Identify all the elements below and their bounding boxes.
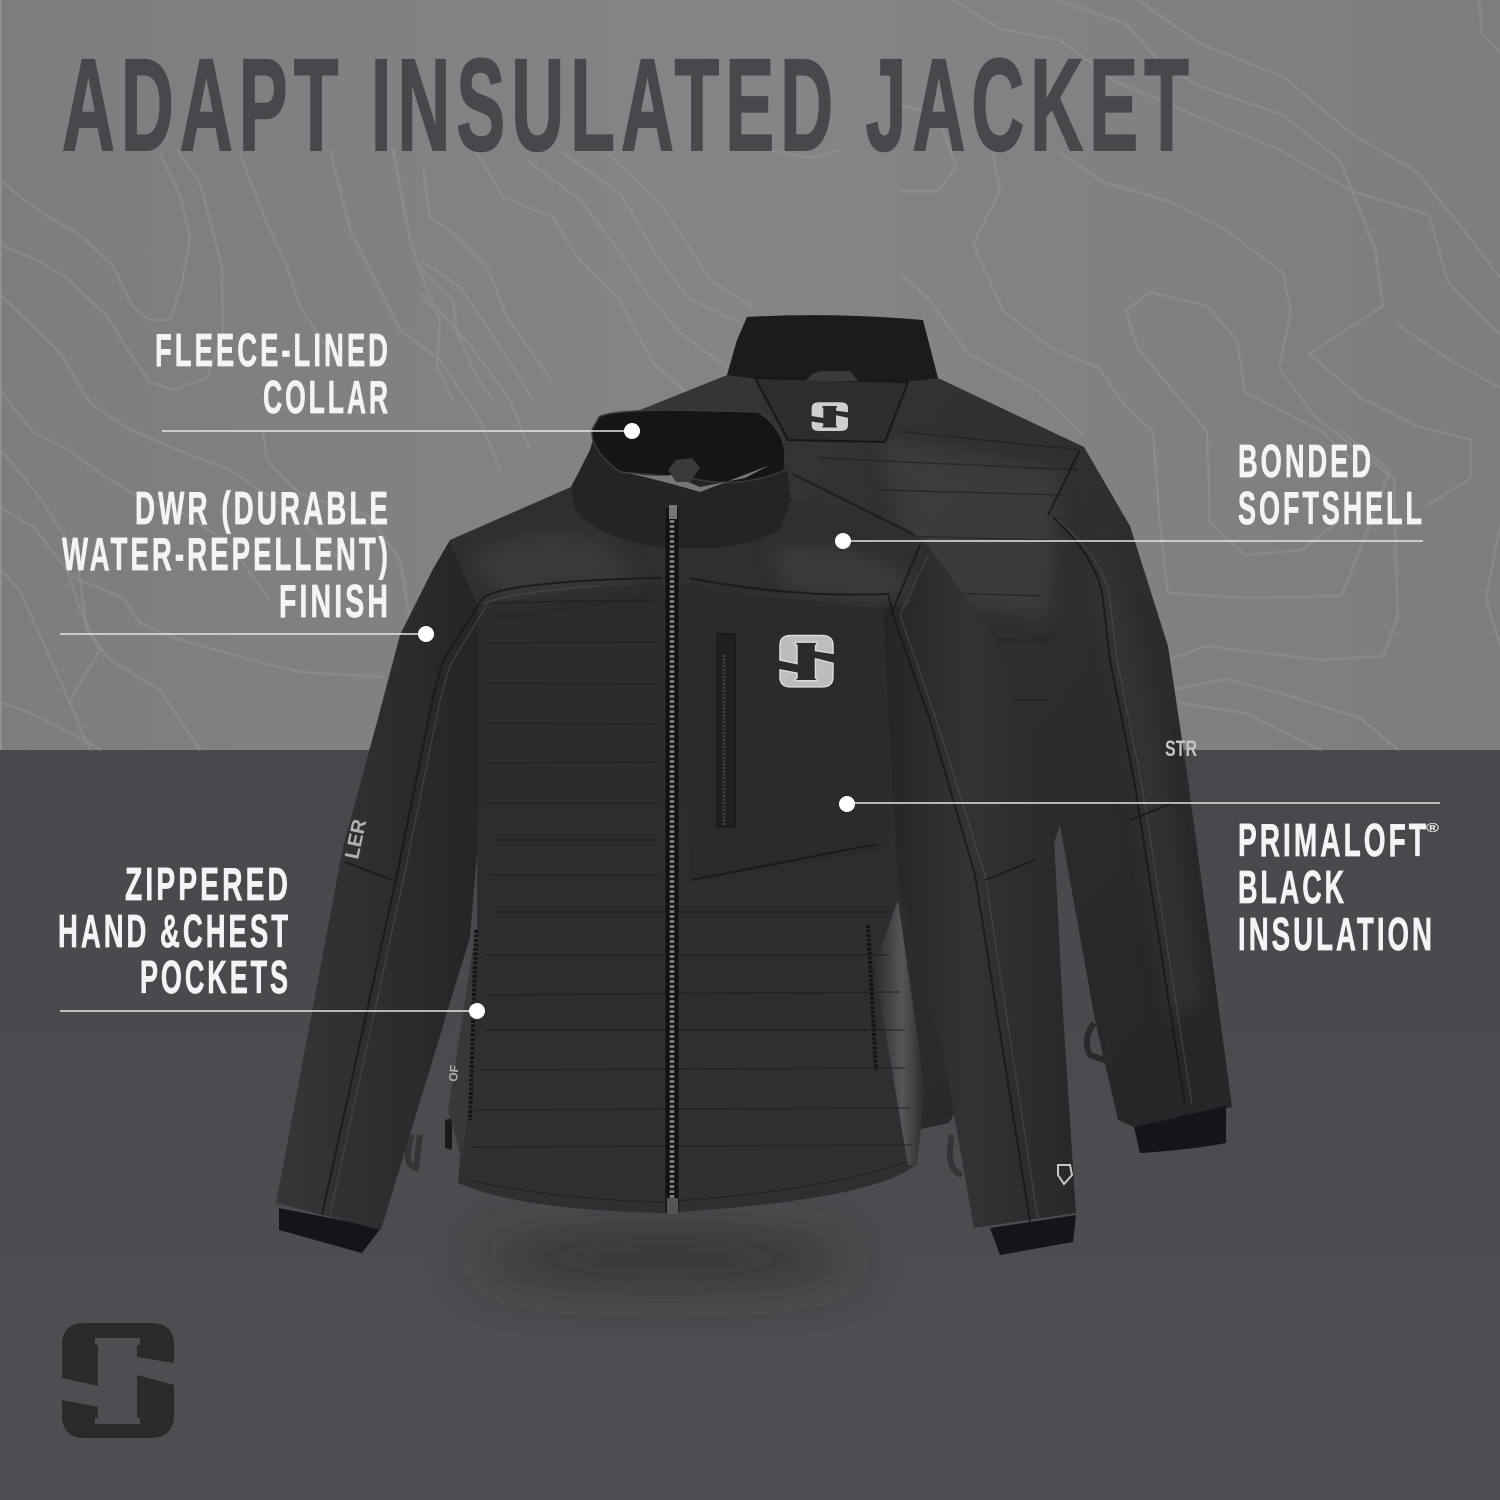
rear cuff	[1134, 1106, 1226, 1153]
rear sleeve brand text: STR	[1165, 736, 1197, 761]
right hand pocket zip	[868, 925, 876, 1070]
marker dot	[835, 533, 851, 549]
rear collar	[727, 315, 938, 384]
right thumb loop	[950, 1135, 962, 1175]
marker dot	[469, 1003, 485, 1019]
label text: HAND &CHEST	[58, 905, 291, 957]
label text: ®	[1426, 820, 1440, 835]
chest zip pocket	[717, 634, 735, 827]
shoulder highlight	[470, 533, 640, 600]
label text: BLACK	[1238, 861, 1347, 913]
label text	[155, 324, 391, 423]
right cuff mark	[1058, 1165, 1072, 1184]
yoke seam	[483, 578, 662, 598]
marker dot	[839, 796, 855, 812]
zipper pull	[667, 1198, 678, 1214]
label text: BONDED	[1238, 435, 1374, 487]
callout: bonded softshell	[835, 435, 1425, 549]
label text: COLLAR	[263, 371, 391, 423]
leader line	[843, 540, 1423, 542]
body	[458, 560, 917, 1213]
front jacket	[276, 410, 1076, 1255]
stand collar	[571, 412, 791, 548]
collar zip pull	[669, 505, 677, 519]
label text: FLEECE-LINED	[155, 324, 391, 376]
topographic contour pattern	[0, 0, 1500, 750]
collar lining band	[615, 465, 770, 492]
side lining sheen	[868, 900, 925, 1165]
rear jacket	[600, 315, 1232, 1153]
rear sleeve seams	[1048, 450, 1185, 1105]
sleeve seams	[322, 598, 483, 1215]
leader line	[60, 633, 427, 635]
marker dot	[418, 626, 434, 642]
zipper	[666, 508, 678, 1213]
right shoulder highlight	[770, 548, 910, 600]
rear yoke panel	[755, 378, 908, 442]
collar inner fleece	[592, 410, 785, 482]
background: upper grey panel	[0, 0, 1500, 750]
rear quilting	[820, 432, 1080, 700]
left thumb loop	[408, 1135, 420, 1168]
left cuff	[279, 1208, 381, 1253]
chest logo	[780, 635, 833, 687]
right sleeve	[880, 543, 1076, 1228]
hem brand text: OF	[446, 1064, 461, 1082]
label text: WATER-REPELLENT)	[62, 528, 391, 580]
rear back highlight	[880, 440, 1060, 620]
callout: DWR finish	[60, 482, 434, 642]
label text	[1238, 814, 1440, 960]
left edge highlight	[0, 0, 2, 750]
rear loop	[806, 371, 858, 381]
rear logo	[812, 402, 848, 431]
rear sleeve highlight	[1095, 520, 1200, 1020]
right cuff	[990, 1215, 1076, 1255]
rear jacket body and sleeve	[600, 375, 1232, 1130]
leader line	[60, 1010, 477, 1012]
background: lower charcoal panel	[0, 750, 1500, 1500]
left inner lining piece	[445, 1118, 452, 1150]
label text: FINISH	[279, 575, 391, 627]
left sleeve	[276, 540, 490, 1230]
chest pocket bottom seam	[692, 845, 878, 880]
bottom-left logo	[62, 1323, 174, 1438]
label text	[1238, 435, 1425, 534]
left sleeve brand text: LER	[341, 817, 371, 861]
inner hanger loop	[668, 458, 700, 482]
label text: ZIPPERED	[125, 858, 291, 910]
callout: fleece-lined collar	[155, 324, 640, 439]
leader line	[162, 430, 632, 432]
right shoulder back seam	[793, 474, 915, 535]
label text	[58, 858, 291, 1003]
marker dot	[624, 423, 640, 439]
chest pocket panel	[690, 590, 890, 880]
leader line	[847, 802, 1440, 804]
callout: primaloft black insulation	[839, 796, 1440, 960]
label text: DWR (DURABLE	[135, 482, 391, 534]
left hand pocket zip	[470, 930, 476, 1120]
rear thumb loop	[1087, 1023, 1110, 1062]
left side lining	[448, 935, 475, 1160]
label text	[62, 482, 391, 627]
jacket shadow	[475, 1232, 855, 1284]
yoke and shoulders	[450, 487, 926, 611]
quilt lines	[468, 600, 912, 1202]
callout: zippered pockets	[58, 858, 485, 1019]
label text: POCKETS	[140, 951, 291, 1003]
